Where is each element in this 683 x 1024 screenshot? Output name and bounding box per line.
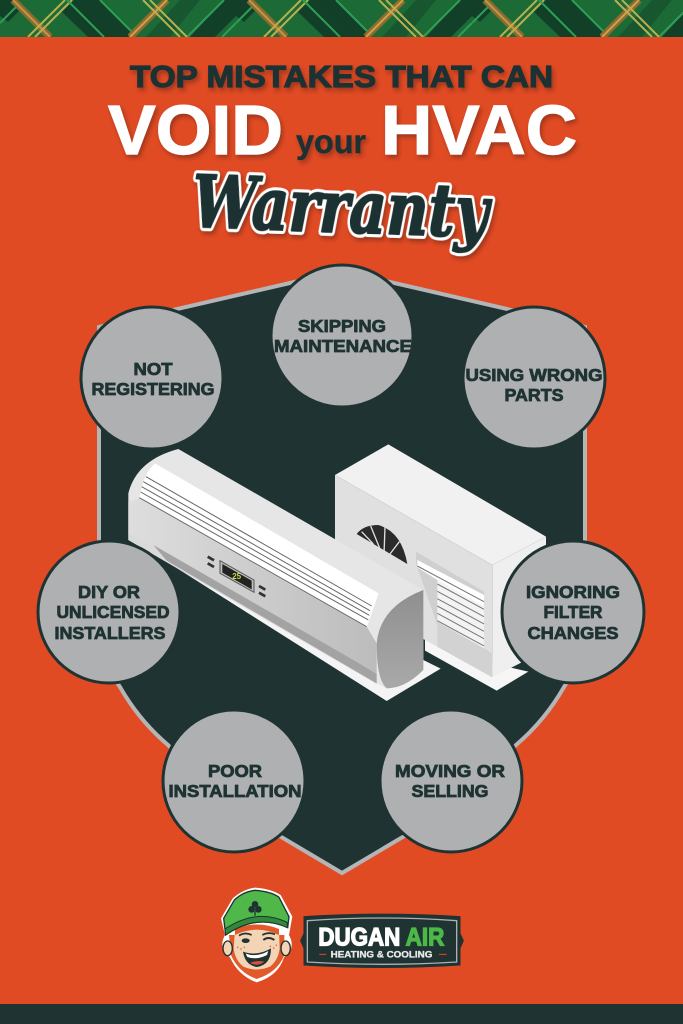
plaid top band — [0, 0, 683, 37]
heading word: warranty: Warranty — [191, 159, 493, 254]
circle: ignoring filter changes — [502, 541, 644, 683]
circle: diy or unlicensed installers — [38, 541, 180, 683]
logo badge: AIR — [406, 923, 444, 951]
fan — [357, 525, 407, 564]
icon: mascot face — [221, 888, 292, 982]
heading word: warranty: Warranty — [191, 159, 493, 254]
heading word: your: your — [296, 123, 366, 160]
circle: poor installation: INSTALLATION — [168, 781, 302, 801]
circle: ignoring filter changes: FILTER — [544, 602, 603, 622]
indoor unit — [128, 449, 441, 701]
circle: not registering — [81, 307, 223, 449]
end cap — [377, 590, 423, 688]
outdoor unit — [335, 444, 546, 691]
display — [220, 561, 254, 592]
buttons — [208, 557, 265, 596]
vent — [139, 463, 379, 627]
circle: ignoring filter changes: CHANGES — [528, 623, 618, 643]
circle: diy or unlicensed installers: INSTALLERS — [54, 623, 166, 643]
circle: skipping maintenance — [271, 265, 413, 407]
grille — [416, 552, 484, 650]
circle: moving or selling: MOVING OR — [395, 761, 505, 781]
indoor unit: 25 — [232, 572, 242, 581]
title — [108, 59, 577, 254]
circle: diy or unlicensed installers: UNLICENSED — [56, 602, 170, 622]
heading line: top mistakes: TOP MISTAKES THAT CAN — [130, 59, 553, 94]
circle: skipping maintenance: SKIPPING — [298, 316, 386, 336]
shield — [99, 271, 585, 873]
circle: using wrong parts: USING WRONG — [466, 365, 602, 385]
logo badge — [301, 914, 463, 967]
bottom band — [0, 1004, 683, 1024]
heading word: hvac: HVAC — [381, 91, 577, 169]
logo text: heating and cooling: HEATING & COOLING — [331, 949, 432, 959]
circle: poor installation: POOR — [208, 761, 262, 781]
circle: using wrong parts — [463, 307, 605, 449]
circle: diy or unlicensed installers: DIY OR — [78, 582, 140, 602]
circle: using wrong parts: PARTS — [504, 385, 564, 405]
illustration: air conditioner units — [128, 444, 546, 701]
logo text: dugan air: DUGAN — [318, 923, 400, 951]
circle: moving or selling — [380, 710, 522, 852]
circle: not registering: REGISTERING — [92, 379, 214, 399]
circle: ignoring filter changes: IGNORING — [526, 582, 620, 602]
circle: poor installation — [163, 710, 305, 852]
circle: not registering: NOT — [134, 359, 173, 379]
heading word: void: VOID — [108, 91, 283, 169]
circle: moving or selling: SELLING — [412, 781, 488, 801]
circle: skipping maintenance: MAINTENANCE — [274, 336, 412, 356]
